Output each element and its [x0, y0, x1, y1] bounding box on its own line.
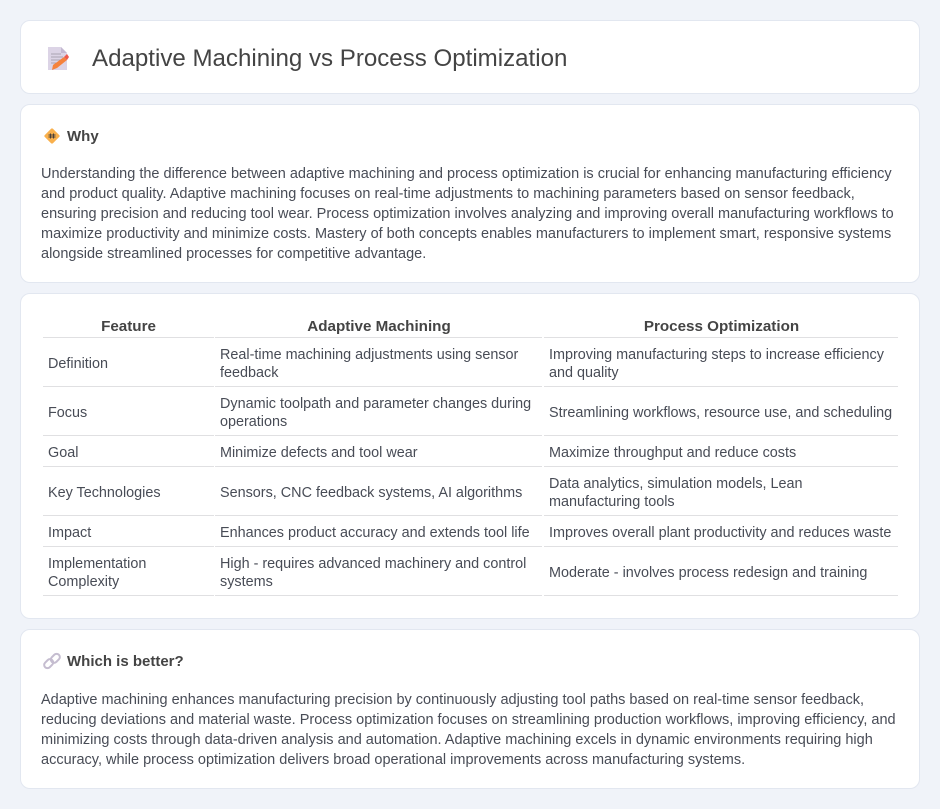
panel: which is better — [20, 629, 920, 789]
table header: Adaptive Machining — [307, 318, 451, 335]
text block: why: Understanding the difference between adaptive machining and process optimization is crucial for enhancing manufacturing efficiency — [41, 166, 892, 182]
icon: document with pencil — [48, 47, 69, 70]
row: focus: Streamlining workflows, resource use, and scheduling — [549, 405, 892, 421]
heading: why: Why — [67, 128, 99, 145]
row: implementation complexity: Implementation — [48, 556, 146, 572]
row: definition: Definition — [48, 356, 108, 372]
row: focus — [48, 396, 892, 430]
row: implementation complexity: Moderate - involves process redesign and training — [549, 565, 867, 581]
title heading: Adaptive Machining vs Process Optimization — [92, 45, 567, 72]
row: key technologies: Sensors, CNC feedback systems, AI algorithms — [220, 485, 522, 501]
row: implementation complexity: systems — [220, 574, 273, 590]
text block: why: ensuring precision and reducing tool wear. Process optimization involves analyzing and improving overall manufacturing workflows to — [41, 206, 894, 222]
text block: why — [41, 166, 894, 262]
text block: which is better: reducing deviations and material waste. Process optimization focuses on streamlining production workflows, improving efficiency, and — [41, 712, 896, 728]
row: definition: feedback — [220, 365, 278, 381]
text block: which is better: accuracy, while process optimization delivers broad operational improvements across manufacturing systems. — [41, 752, 745, 768]
row: key technologies: manufacturing tools — [549, 494, 675, 510]
text block: why: and product quality. Adaptive machining focuses on real-time adjustments to machining parameters based on sensor feedback, — [41, 186, 855, 202]
row: implementation complexity: Complexity — [48, 574, 119, 590]
panel: why — [20, 104, 920, 283]
row: definition: Real-time machining adjustments using sensor — [220, 347, 518, 363]
row: definition — [48, 347, 884, 381]
row: focus: operations — [220, 414, 287, 430]
text block: which is better: minimizing costs through data-driven analysis and automation. Adaptive machining excels in dynamic environments requiring high — [41, 732, 873, 748]
text block: why: alongside streamlined processes for competitive advantage. — [41, 246, 426, 262]
row: impact: Improves overall plant productivity and reduces waste — [549, 525, 891, 541]
heading: which is better: Which is better? — [67, 653, 184, 670]
panel: title — [20, 20, 920, 94]
icon: warning diamond — [44, 128, 60, 144]
text block: which is better — [41, 692, 896, 768]
row: implementation complexity: High - requires advanced machinery and control — [220, 556, 526, 572]
row: goal: Maximize throughput and reduce costs — [549, 445, 796, 461]
row: definition: Improving manufacturing steps to increase efficiency — [549, 347, 884, 363]
row: impact: Enhances product accuracy and extends tool life — [220, 525, 530, 541]
text block: which is better: Adaptive machining enhances manufacturing precision by continuously adjusting tool paths based on real-time sensor feedback, — [41, 692, 864, 708]
row: goal: Minimize defects and tool wear — [220, 445, 418, 461]
row: goal: Goal — [48, 445, 78, 461]
panel: comparison table — [20, 293, 920, 619]
text block: why: maximize productivity and minimize costs. Mastery of both concepts enables manufacturers to implement smart, responsive systems — [41, 226, 891, 242]
row: impact — [48, 525, 891, 541]
table header: Feature — [101, 318, 156, 335]
row: key technologies — [48, 476, 803, 510]
table header: Process Optimization — [644, 318, 799, 335]
table header — [101, 318, 799, 335]
row: definition: and quality — [549, 365, 619, 381]
row: goal — [48, 445, 796, 461]
row: key technologies: Data analytics, simulation models, Lean — [549, 476, 803, 492]
row: focus: Dynamic toolpath and parameter changes during — [220, 396, 531, 412]
row: impact: Impact — [48, 525, 91, 541]
icon: chain link — [43, 652, 61, 670]
row: implementation complexity — [48, 556, 867, 590]
row: focus: Focus — [48, 405, 87, 421]
row: key technologies: Key Technologies — [48, 485, 161, 501]
